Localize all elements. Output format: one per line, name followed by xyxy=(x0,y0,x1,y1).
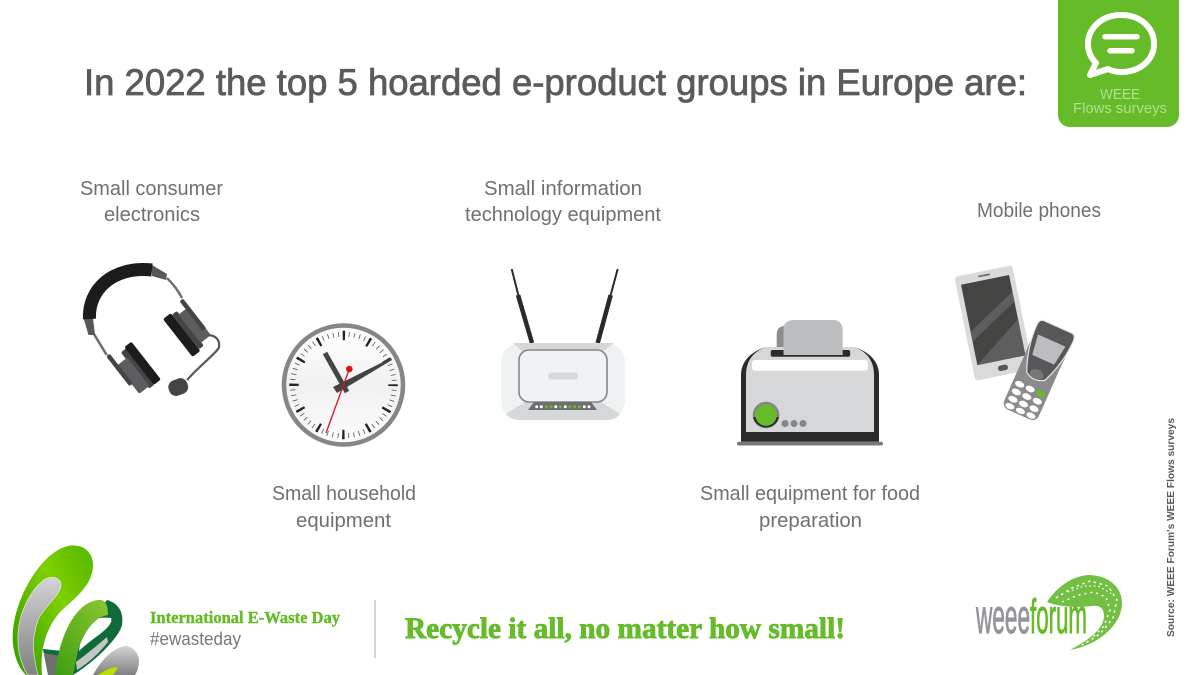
logo: WEEE Forum: forum xyxy=(1030,591,1087,644)
icon: toaster xyxy=(737,320,883,446)
slogan: Recycle it all, no matter how small! xyxy=(405,612,845,645)
label: small consumer electronics: electronics xyxy=(104,204,200,226)
logo: WEEE Forum: weee xyxy=(976,591,1030,644)
label: small equipment for food preparation xyxy=(700,483,920,532)
label: small equipment for food preparation: Small equipment for food xyxy=(700,483,920,505)
label: small information technology equipment xyxy=(465,178,661,226)
logo: International E-Waste Day xyxy=(13,545,139,675)
label: small information technology equipment: technology equipment xyxy=(465,204,661,226)
label: small household equipment: equipment xyxy=(296,510,391,532)
label: small equipment for food preparation: preparation xyxy=(759,510,862,532)
icon: speech bubble xyxy=(1088,15,1154,75)
hashtag: #ewasteday xyxy=(150,629,241,649)
campaign name: International E-Waste Day xyxy=(150,608,340,627)
label: small consumer electronics xyxy=(80,178,223,226)
badge label: WEEE: WEEE xyxy=(1100,86,1140,103)
badge label: Flows surveys: Flows surveys xyxy=(1073,100,1167,117)
label: small consumer electronics: Small consumer xyxy=(80,178,223,200)
title: In 2022 the top 5 hoarded e-product groups in Europe are: xyxy=(84,62,1027,103)
badge: WEEE Flows surveys xyxy=(1058,0,1179,127)
label: small information technology equipment: Small information xyxy=(484,178,642,200)
logo: WEEE Forum xyxy=(976,575,1122,650)
swoosh xyxy=(1047,575,1122,650)
source note: Source: WEEE Forum's WEEE Flows surveys xyxy=(1165,418,1177,637)
icon: wifi router xyxy=(501,269,625,420)
icon: wall clock xyxy=(284,326,403,444)
label: mobile phones: Mobile phones xyxy=(977,200,1101,222)
label: small household equipment: Small household xyxy=(272,483,416,505)
icon: bubble lines xyxy=(1105,37,1137,51)
icon: smartphone and mobile phone xyxy=(954,265,1076,423)
label: small household equipment xyxy=(272,483,416,532)
icon: headset xyxy=(84,265,219,398)
